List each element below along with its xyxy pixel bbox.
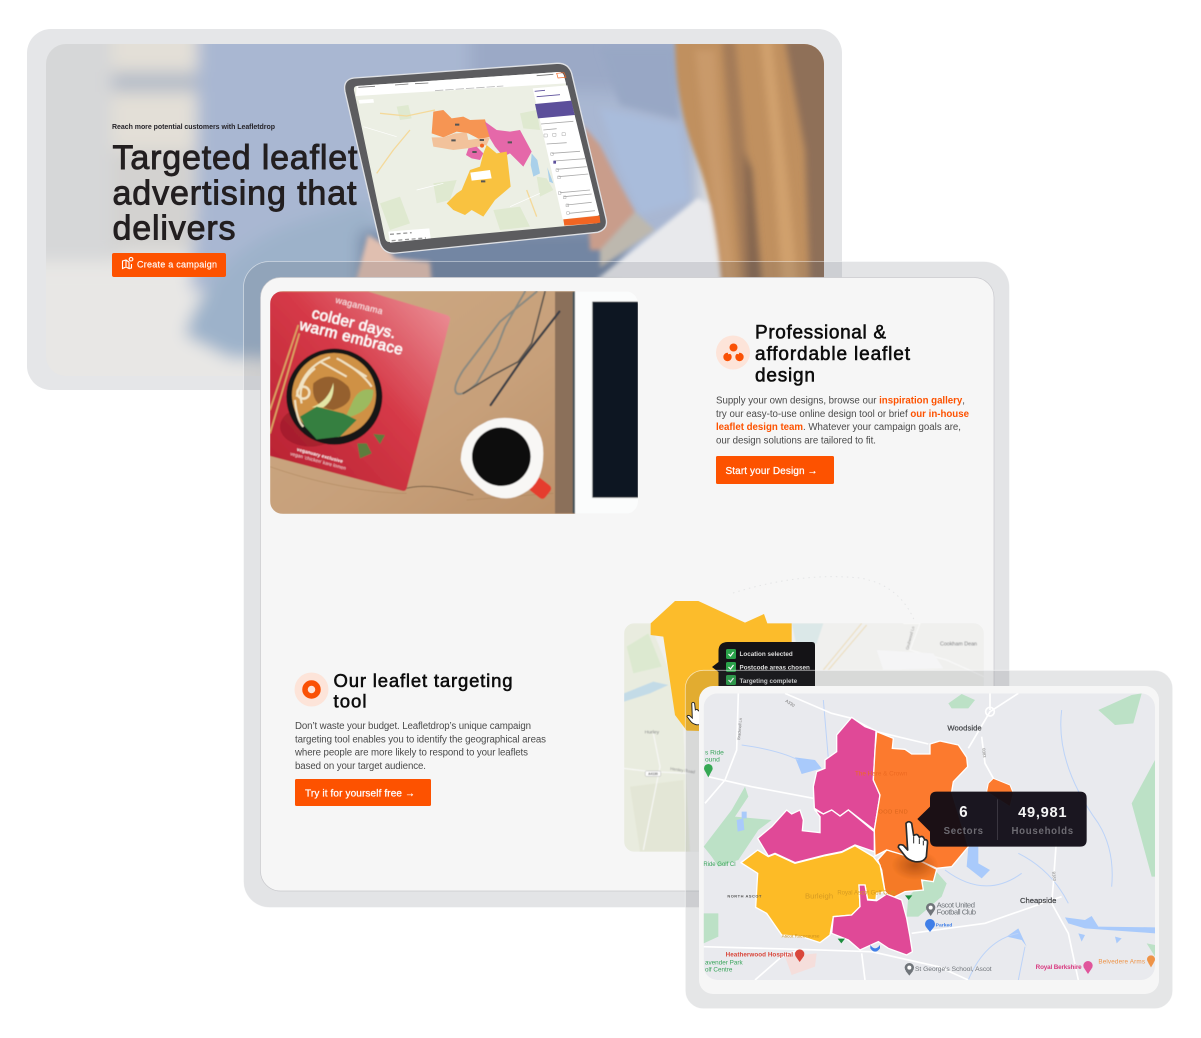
labels: Belvedere Arms [1098,958,1145,965]
labels: St George's School, Ascot [915,966,992,973]
labels: Heatherwood Hospital [726,952,793,959]
text: targeting description: where people are more likely to respond to your leaflets [294,748,528,758]
labels: OOD END [878,810,908,816]
text: targeting description: based on your target audience. [295,761,426,772]
panel: map frame [685,670,1173,1009]
button: try it for yourself free [295,779,431,806]
photo: wagamama leaflet on a desk: colder days. [310,305,398,342]
heading: leaflet targeting tool [334,670,512,712]
labels: Royal Ascot Golf Club [837,891,896,897]
button: start your design: Start your Design → [726,466,818,477]
water [737,757,1155,947]
hero heading [112,139,358,248]
hospital ground [785,953,817,975]
labels: Ascot Racecourse [782,934,820,939]
checklist tooltip [712,642,815,700]
panel: hero frame [27,29,842,390]
sector: pink south [832,885,912,955]
heading: professional leaflet design: design [755,366,815,386]
hero heading: advertising that [112,174,357,212]
map: targeting tool with yellow area [624,601,984,852]
text: design description: Supply your own designs, browse our inspiration gallery, [716,396,965,406]
photo: wagamama leaflet on a desk: vegan 'chicken' kare lomen [290,451,347,471]
labels: The Hare & Crown [855,770,908,777]
checklist tooltip: Targeting complete [740,678,798,685]
labels: s Ride [705,749,724,756]
yellow targeted area [651,601,792,733]
labels: A330 [784,698,796,708]
labels: Ascot United [937,900,975,909]
map patches [380,105,553,230]
panel: map card [699,686,1159,994]
checklist tooltip: Postcode areas chosen [740,664,810,672]
icon: small hand cursor [687,702,703,725]
glasses [455,292,559,405]
tooltip: sectors and households: Sectors [944,826,983,837]
decorative dotted arc [733,577,915,622]
text: targeting description [294,721,546,772]
hero heading: Targeted leaflet [112,139,358,177]
map: targeting tool with yellow area: Henley Road [670,766,696,775]
labels: Football Club [937,907,976,916]
icon: map pin [122,257,133,268]
hero eyebrow text: Reach more potential customers with Leafletdrop [112,124,275,131]
labels: olf Centre [705,967,733,974]
icon: target [294,672,328,706]
hero button: create a campaign: Create a campaign [137,260,217,270]
map: targeting tool with yellow area: A4130 [648,772,658,776]
tooltip: sectors and households [917,792,1087,847]
labels: B383 [1051,871,1057,882]
parks [704,693,1155,957]
map: targeting tool with yellow area: Grubwood Ln [904,626,915,650]
sector: pink north [813,717,880,830]
labels: avender Park [705,960,743,967]
labels: Burleigh [805,892,833,901]
tablet showing targeting map [345,63,607,253]
photo: wagamama leaflet on a desk: veganuary exclusive [296,447,344,464]
labels: ound [705,756,720,763]
labels: B383 [981,748,987,758]
panel: hero photo of person using a tablet [46,44,824,366]
button: start your design [716,456,834,484]
panel: services card [260,278,994,891]
map: selected postcode sectors [703,693,1155,980]
top bar [356,72,566,96]
labels: Parked [936,922,952,928]
icon: hand cursor [898,822,928,862]
photo: wagamama leaflet on a desk [270,291,640,514]
sidebar [533,85,599,219]
labels: Ride Golf Cl [703,862,736,868]
sector: orange [873,732,968,868]
labels: NORTH ASCOT [727,894,762,899]
text: design description: our design solutions are tailored to fit. [716,436,876,446]
labels: Cheapside [1020,896,1056,905]
panel: services frame [244,262,1010,908]
checklist tooltip: Location selected [740,651,793,658]
labels: Bracknell Ln [736,718,743,740]
text: design description: try our easy-to-use online design tool or brief our in-house [716,409,970,420]
map: targeting tool with yellow area: Cookham Dean [940,641,977,647]
hero heading: delivers [112,210,236,248]
photo: wagamama leaflet on a desk: warm embrace [297,316,405,359]
roads [704,693,1078,980]
sector: dark orange [878,850,937,898]
labels: Royal Berkshire [1036,964,1082,971]
hero button: create a campaign [112,253,226,277]
sector: yellow [741,846,885,943]
map pins [704,764,1155,976]
labels [703,698,1145,974]
tooltip: sectors and households: Households [1011,826,1073,837]
leaflet [270,292,450,491]
map: targeting tool with yellow area: Hurley [645,729,660,735]
icon: three circles [716,336,750,370]
tooltip: sectors and households: 49,981 [1018,805,1066,821]
text: design description: leaflet design team. Whatever your campaign goals are, [716,422,961,433]
heading: leaflet targeting tool: tool [334,690,366,712]
heading: professional leaflet design: Professional & [755,322,886,344]
sector: pink west [758,809,874,863]
labels: Woodside [947,723,982,732]
heading: professional leaflet design [755,322,911,386]
button: try it for yourself free: Try it for yourself free → [305,788,415,800]
photo: wagamama leaflet on a desk: wagamama [334,295,384,316]
tooltip: sectors and households: 6 [959,804,968,821]
heading: leaflet targeting tool: Our leaflet targeting [334,670,512,691]
text: targeting description: Don’t waste your budget. Leafletdrop’s unique campaign [295,721,531,732]
text: targeting description: targeting tool enables you to identify the geographical areas [295,734,546,745]
coffee cup [530,477,552,500]
heading: professional leaflet design: affordable leaflet [755,344,911,365]
text: design description [716,396,970,446]
